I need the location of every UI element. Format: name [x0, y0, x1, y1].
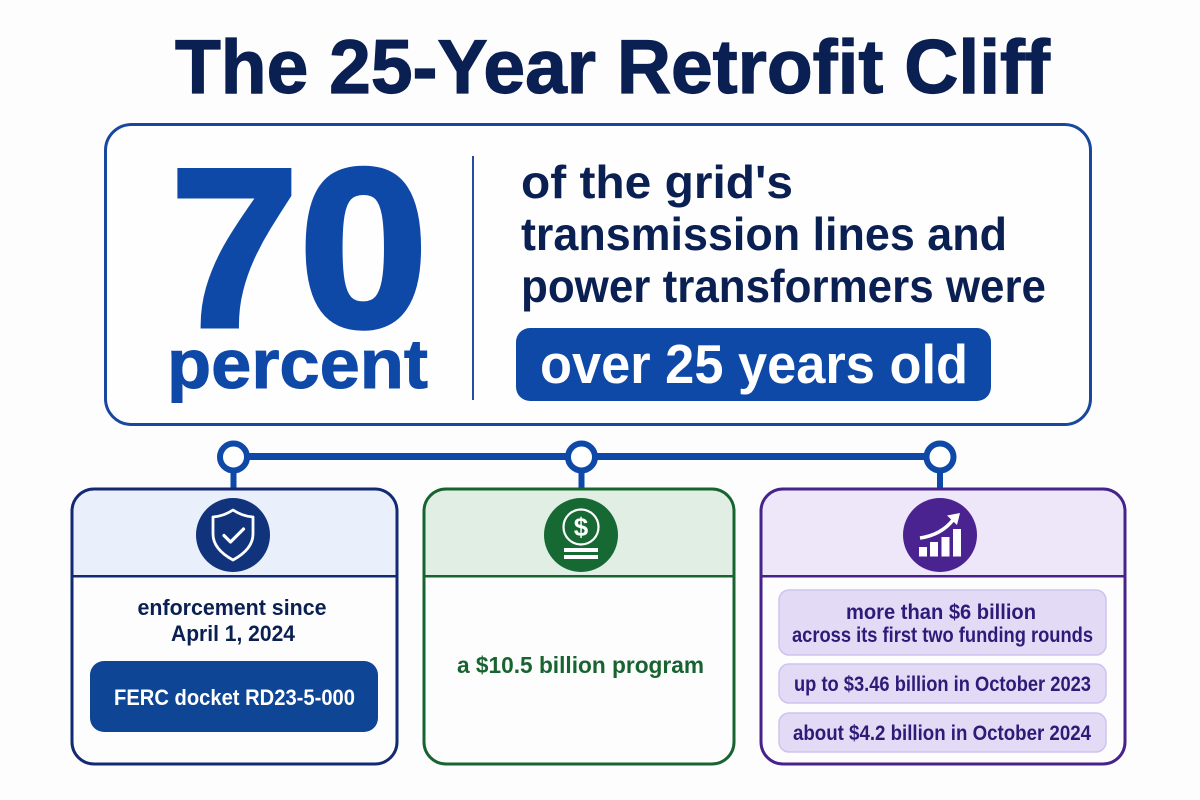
icon: dollar coin: $ — [574, 512, 589, 542]
statement text — [521, 156, 1046, 312]
statement text: power transformers were — [521, 260, 1046, 312]
enforcement text: enforcement since — [138, 595, 326, 620]
enforcement text: April 1, 2024 — [171, 621, 296, 646]
funding row: total: more than $6 billion — [846, 600, 1036, 624]
funding row: October 2024 — [779, 713, 1106, 752]
funding row: total — [779, 590, 1106, 655]
title: The 25-Year Retrofit Cliff — [175, 25, 1051, 110]
enforcement text — [138, 595, 326, 646]
panel: funding rounds — [761, 489, 1125, 764]
big number 70: 70 — [170, 121, 428, 374]
statement text: transmission lines and — [521, 208, 1007, 260]
icon: rising bar chart — [903, 498, 977, 572]
funding row: October 2024: about $4.2 billion in October 2024 — [793, 721, 1091, 745]
percent label: percent — [167, 325, 428, 403]
docket pill — [90, 661, 378, 732]
highlight pill: over 25 years old — [540, 333, 968, 395]
statement text: of the grid's — [521, 156, 793, 208]
panel: program — [424, 489, 734, 764]
icon: dollar coin — [544, 498, 618, 572]
funding row: October 2023 — [779, 664, 1106, 703]
timeline connector — [220, 444, 954, 490]
docket pill: FERC docket RD23-5-000 — [114, 685, 355, 710]
funding row: total: across its first two funding rounds — [792, 623, 1093, 647]
icon: shield with check — [196, 498, 270, 572]
panel: main statistic — [106, 121, 1090, 424]
panel: enforcement — [72, 489, 397, 764]
funding row: October 2023: up to $3.46 billion in October 2023 — [794, 672, 1091, 696]
program text: a $10.5 billion program — [457, 652, 704, 678]
